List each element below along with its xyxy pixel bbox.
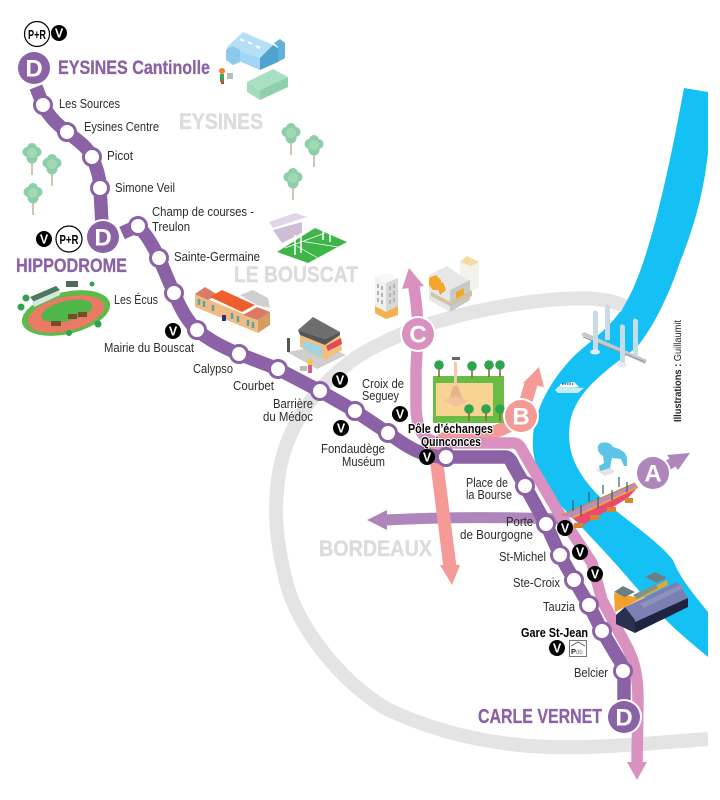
station: Porte de Bourgogne: Porte	[506, 514, 533, 529]
icon: river shuttle boat	[555, 382, 584, 393]
station: D terminus Carle Vernet	[606, 699, 642, 735]
badge: bike Gare St-Jean	[549, 640, 565, 656]
station: Les Ecus: Les Écus	[114, 292, 158, 307]
station: St-Michel: St-Michel	[499, 549, 546, 564]
station: D Hippodrome: D	[94, 224, 112, 252]
station: D terminus Eysines Cantinolle: D	[25, 56, 43, 82]
station: Fondaudege Museum	[321, 402, 385, 469]
badge: bike Fondaudege: V	[337, 422, 346, 436]
district name: Eysines: EYSINES	[179, 109, 263, 134]
line A arrow east	[660, 453, 690, 470]
badge: bike Porte de Bourgogne: V	[561, 522, 570, 536]
station: Calypso	[193, 346, 248, 376]
station: Porte de Bourgogne	[460, 514, 554, 542]
icon: Quinconces park with monument	[433, 357, 505, 423]
trees left of line	[22, 143, 62, 215]
station: Simone Veil	[92, 180, 175, 196]
icon: business park buildings	[219, 32, 288, 100]
badge: bike Barriere: V	[336, 374, 345, 388]
badge: bike Gare St-Jean: V	[553, 642, 562, 656]
station: Les Sources: Les Sources	[59, 96, 120, 111]
station: Quinconces: Pôle d’échanges	[408, 421, 493, 436]
station: Quinconces	[408, 421, 493, 466]
line badge: A: A	[644, 460, 662, 488]
icon: residential tower	[375, 273, 398, 319]
icon: parking Gare St-Jean: db	[576, 650, 583, 656]
station: St-Michel	[499, 546, 568, 564]
badge: bike St-Michel: V	[576, 546, 585, 560]
badge: bike Eysines: V	[55, 26, 64, 40]
line badge: B	[503, 398, 539, 434]
station: Fondaudege Museum: Muséum	[342, 454, 385, 469]
station: D terminus Carle Vernet: D	[615, 704, 633, 732]
badge: park and ride Hippodrome: P+R	[60, 232, 79, 247]
badge: bike Hippodrome	[36, 231, 52, 247]
station: Courbet	[233, 360, 286, 393]
station: Champ de courses - Treulon: Treulon	[152, 219, 190, 234]
line D main route	[122, 226, 624, 705]
station: Champ de courses - Treulon: Champ de courses -	[152, 204, 254, 219]
station: Sainte-Germaine: Sainte-Germaine	[174, 249, 260, 264]
line badge: B: B	[512, 404, 530, 430]
station: Eysines Centre: Eysines Centre	[84, 119, 159, 134]
heading: Eysines Cantinolle: EYSINES Cantinolle	[58, 57, 210, 79]
badge: bike Croix de Seguey	[392, 406, 408, 422]
station: Belcier	[574, 662, 632, 680]
line D route north branch	[36, 87, 102, 225]
station: Porte de Bourgogne: de Bourgogne	[460, 527, 533, 542]
badge: bike Quinconces	[419, 449, 435, 465]
station: Croix de Seguey: Seguey	[362, 388, 399, 403]
station: D Hippodrome	[85, 219, 121, 255]
line B salmon route	[435, 367, 544, 585]
line badge: C	[400, 316, 436, 352]
station: Barriere du Medoc: du Médoc	[263, 409, 313, 424]
icon: parking Gare St-Jean: P	[571, 647, 576, 656]
station: Les Ecus	[114, 284, 182, 307]
heading: Hippodrome: HIPPODROME	[16, 256, 127, 277]
line A arrow west	[367, 510, 560, 530]
station: Champ de courses - Treulon	[130, 204, 254, 234]
line badge: C: C	[409, 322, 427, 348]
station: Mairie du Bouscat: Mairie du Bouscat	[104, 340, 194, 355]
icon: parking Gare St-Jean	[570, 640, 586, 656]
station: Picot: Picot	[107, 148, 133, 163]
badge: bike Eysines	[51, 25, 67, 41]
station: Place de la Bourse: la Bourse	[466, 487, 512, 502]
station: Fondaudege Museum: Fondaudège	[321, 441, 385, 456]
badge: bike Ste-Croix: V	[591, 568, 600, 582]
city ring road	[276, 298, 708, 747]
station: Picot	[84, 148, 133, 166]
station: Tauzia: Tauzia	[543, 599, 576, 614]
badge: park and ride Eysines	[24, 22, 50, 46]
station: Mairie du Bouscat	[104, 322, 206, 355]
badge: bike Croix de Seguey: V	[396, 408, 405, 422]
icon: hippodrome race track	[17, 281, 115, 344]
icon: rugby stadium	[269, 213, 347, 263]
station: Calypso: Calypso	[193, 361, 233, 376]
station: D terminus Eysines Cantinolle	[16, 50, 52, 86]
badge: park and ride Eysines: P+R	[28, 27, 46, 42]
station: Ste-Croix	[513, 572, 582, 590]
icon: town hall building	[195, 287, 270, 333]
station: Place de la Bourse	[466, 475, 534, 502]
station: Ste-Croix: Ste-Croix	[513, 575, 560, 590]
icon: stone bridge	[562, 477, 638, 528]
station: Croix de Seguey	[362, 376, 404, 442]
station: Simone Veil: Simone Veil	[115, 180, 175, 195]
station: Quinconces: Quinconces	[421, 434, 481, 449]
district name: Le Bouscat: LE BOUSCAT	[234, 262, 358, 287]
label: illustration credit: Illustrations : Guillaumit	[672, 320, 684, 422]
badge: bike Fondaudege	[333, 420, 349, 436]
station: Sainte-Germaine	[150, 249, 260, 266]
badge: park and ride Hippodrome	[56, 226, 82, 252]
line C pink route	[402, 268, 647, 780]
badge: bike Mairie: V	[169, 324, 178, 338]
line badge: A	[635, 455, 671, 491]
badge: bike St-Michel	[572, 544, 588, 560]
station: Tauzia	[543, 596, 598, 614]
district name: Bordeaux: BORDEAUX	[319, 536, 432, 561]
station: Courbet: Courbet	[233, 378, 274, 393]
badge: bike Hippodrome: V	[40, 232, 49, 246]
station: Place de la Bourse: Place de	[466, 475, 508, 490]
trees near stadium	[282, 123, 324, 200]
river Garonne	[533, 88, 708, 657]
icon: shop with awning	[287, 317, 346, 373]
station: Barriere du Medoc	[263, 382, 328, 424]
badge: bike Porte de Bourgogne	[557, 520, 573, 536]
icon: modern apartment block	[429, 256, 479, 312]
station: Belcier: Belcier	[574, 665, 609, 680]
station: Les Sources	[34, 96, 120, 114]
station: Barriere du Medoc: Barrière	[273, 396, 313, 411]
station: Gare St-Jean: Gare St-Jean	[521, 625, 588, 640]
station: Croix de Seguey: Croix de	[362, 376, 404, 391]
badge: bike Mairie	[165, 323, 181, 339]
station: Eysines Centre	[58, 119, 159, 140]
badge: bike Ste-Croix	[587, 566, 603, 582]
heading: Carle Vernet: CARLE VERNET	[478, 706, 602, 728]
icon: Saint-Jean railway station	[614, 572, 688, 633]
icon: blue lion statue	[596, 442, 627, 476]
badge: bike Barriere	[332, 372, 348, 388]
icon: Chaban-Delmas lift bridge	[581, 304, 647, 368]
badge: bike Quinconces: V	[423, 450, 432, 464]
